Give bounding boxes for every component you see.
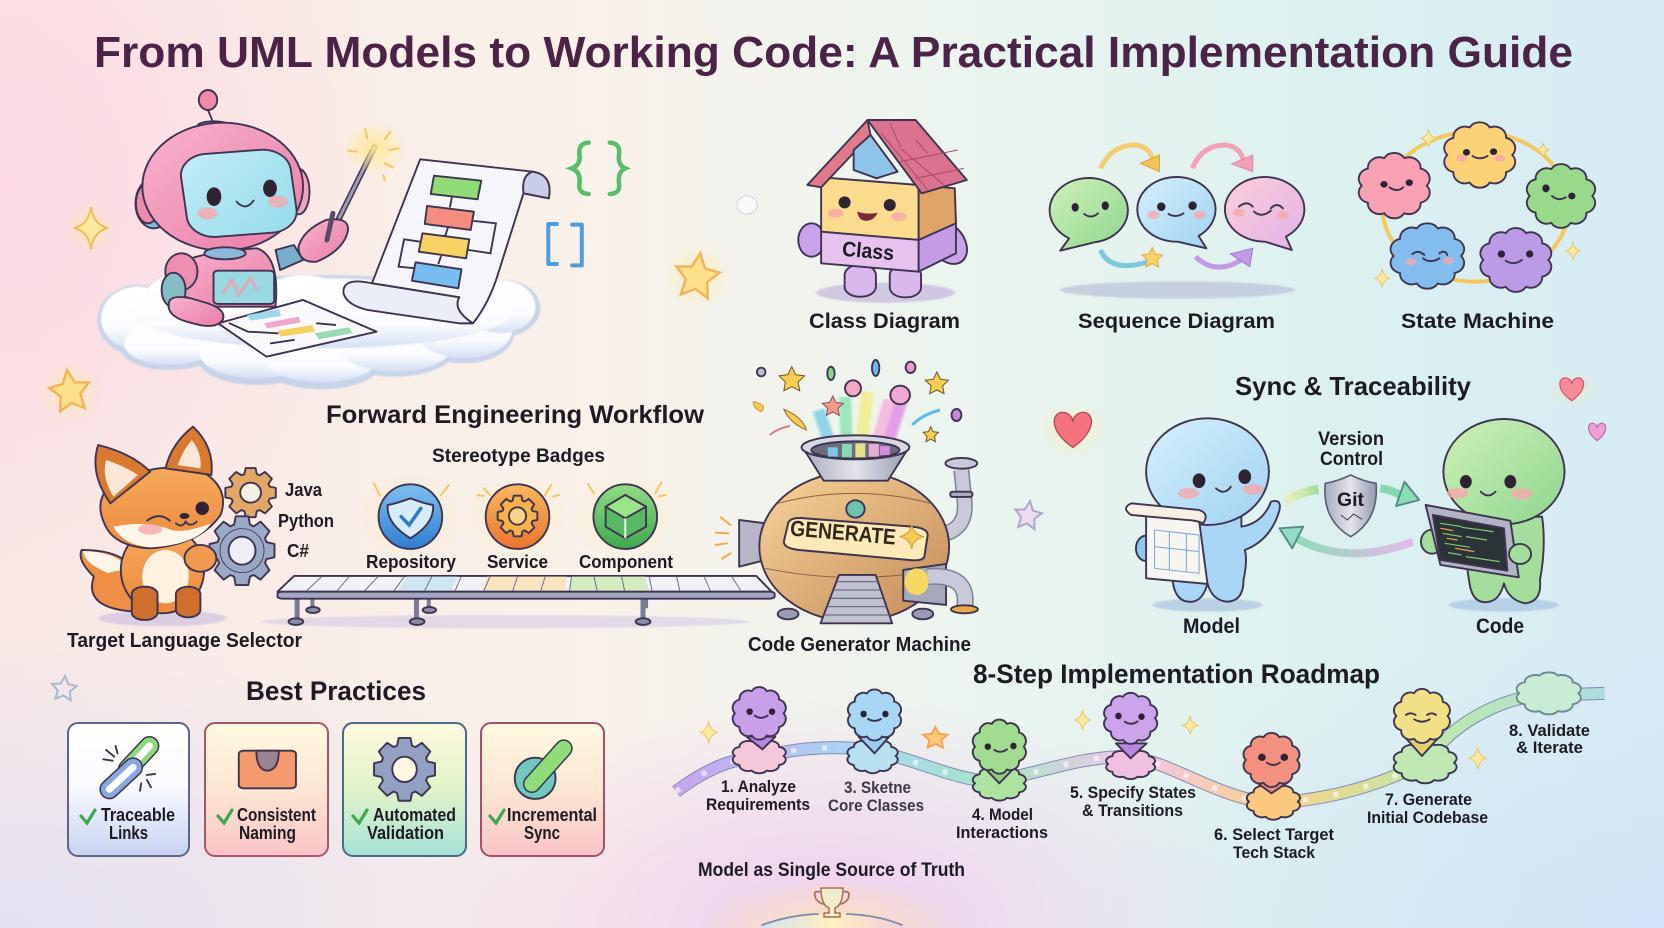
- label: model: Model: [1183, 615, 1240, 638]
- labels: steps: 3. Sketne: [844, 778, 911, 797]
- dome: [759, 914, 905, 928]
- labels: steps: Tech Stack: [1233, 843, 1315, 862]
- labels: steps: & Iterate: [1516, 738, 1583, 757]
- label: component: Component: [579, 552, 673, 572]
- icon: gold stars and sparkles around the hero: [38, 196, 1043, 701]
- labels: steps: 4. Model: [972, 805, 1033, 824]
- icon: code character with tablet: [1421, 419, 1565, 612]
- card: traceable links: Links: [109, 823, 148, 843]
- icon: model character with blueprint: [1126, 418, 1280, 612]
- icon: fox with language gears: [81, 427, 276, 626]
- panel: model as single source of truth: [698, 828, 965, 928]
- icon: state machine blobs: [1359, 122, 1595, 292]
- label: service: Service: [487, 552, 548, 572]
- icon: conveyor belt: [260, 576, 775, 628]
- label: class diagram: Class Diagram: [809, 309, 960, 333]
- icon: trophy: [815, 888, 849, 917]
- card: incremental sync: Sync: [524, 823, 560, 843]
- icon: hearts: [1037, 369, 1606, 458]
- icon: code generator machine: [716, 360, 978, 623]
- card: incremental sync: Incremental: [507, 805, 597, 825]
- labels: steps: 6. Select Target: [1214, 825, 1334, 844]
- heading: stereotype badges: Stereotype Badges: [432, 446, 605, 467]
- label: code: Code: [1476, 615, 1524, 638]
- scroll with flowchart: [343, 159, 550, 323]
- card: automated validation: Automated: [373, 805, 456, 825]
- cloud: [97, 273, 540, 389]
- dome outline: [762, 914, 902, 925]
- language list: Python: [278, 511, 334, 531]
- chart: rainbow road: [676, 693, 1604, 803]
- icon: robot: [135, 90, 406, 326]
- icon: repository shield badge: [355, 473, 465, 560]
- label: repository: Repository: [366, 552, 456, 572]
- heading: roadmap: 8-Step Implementation Roadmap: [973, 659, 1380, 689]
- heading: single source of truth: Model as Single Source of Truth: [698, 860, 965, 881]
- card: consistent naming: Naming: [239, 823, 296, 843]
- card: consistent naming: [205, 723, 328, 856]
- icon: square brackets: [548, 224, 582, 265]
- labels: steps: Interactions: [956, 823, 1048, 842]
- card: traceable links: Traceable: [101, 805, 175, 825]
- panel: 8-step implementation roadmap: [676, 659, 1604, 862]
- card: automated validation: Validation: [367, 823, 444, 843]
- glow behind dome: [702, 828, 962, 928]
- labels: steps: Requirements: [706, 795, 810, 814]
- label: code generator machine: Code Generator Machine: [748, 634, 971, 656]
- labels: steps: Initial Codebase: [1367, 808, 1488, 827]
- badges: repository, service, component: [355, 473, 680, 572]
- label: sequence diagram: Sequence Diagram: [1078, 309, 1275, 333]
- icon: curly braces: [572, 143, 625, 194]
- card: consistent naming: Consistent: [237, 805, 316, 825]
- title: From UML Models to Working Code: A Practical Implementation Guide: [94, 28, 1573, 77]
- panel: forward engineering workflow: [67, 360, 978, 656]
- heading: sync and traceability: Sync & Traceability: [1235, 371, 1472, 401]
- heading: forward engineering workflow: Forward Engineering Workflow: [326, 401, 705, 429]
- labels: steps: 8. Validate: [1509, 721, 1590, 740]
- panel: sync and traceability: [1037, 369, 1606, 638]
- icon: component cube badge: [570, 473, 680, 560]
- label on house: Class: [841, 238, 895, 265]
- label: version control: Version: [1318, 429, 1384, 450]
- steps: characters on the road: [733, 672, 1581, 820]
- labels: steps: 5. Specify States: [1070, 783, 1196, 802]
- panel: best practices: [68, 676, 604, 856]
- labels: steps: 7. Generate: [1385, 790, 1472, 809]
- label: version control: Control: [1320, 449, 1383, 470]
- label: git: Git: [1337, 490, 1365, 511]
- label: state machine: State Machine: [1401, 309, 1554, 333]
- labels: steps: Core Classes: [828, 796, 924, 815]
- rainbow output and confetti: [753, 360, 961, 453]
- icon: service gear badge: [462, 473, 573, 560]
- card: traceable links: [68, 723, 189, 856]
- label: version control: [1318, 429, 1384, 470]
- labels: steps: [706, 721, 1590, 862]
- label: target language selector: Target Language Selector: [67, 630, 302, 652]
- icon: git shield: [1325, 475, 1376, 537]
- labels: steps: 1. Analyze: [721, 777, 796, 796]
- language list: C#: [287, 541, 309, 561]
- icon: road sparkles: [700, 710, 1487, 770]
- card: incremental sync: [481, 723, 604, 856]
- language list: Java: [285, 480, 323, 500]
- label on machine: GENERATE: [789, 515, 897, 550]
- panel: hero robot on a cloud: [97, 90, 625, 389]
- arrows: sync cycle through git: [1280, 482, 1419, 553]
- card: automated validation: [343, 723, 466, 856]
- table diagram sheet: [218, 300, 377, 357]
- language list: [278, 480, 334, 561]
- icon: class diagram house: [798, 120, 973, 303]
- icon: sequence diagram speech bubbles: [1050, 145, 1304, 299]
- panel: UML diagram types: [798, 120, 1595, 333]
- heading: best practices: Best Practices: [246, 676, 426, 706]
- labels: steps: & Transitions: [1082, 801, 1183, 820]
